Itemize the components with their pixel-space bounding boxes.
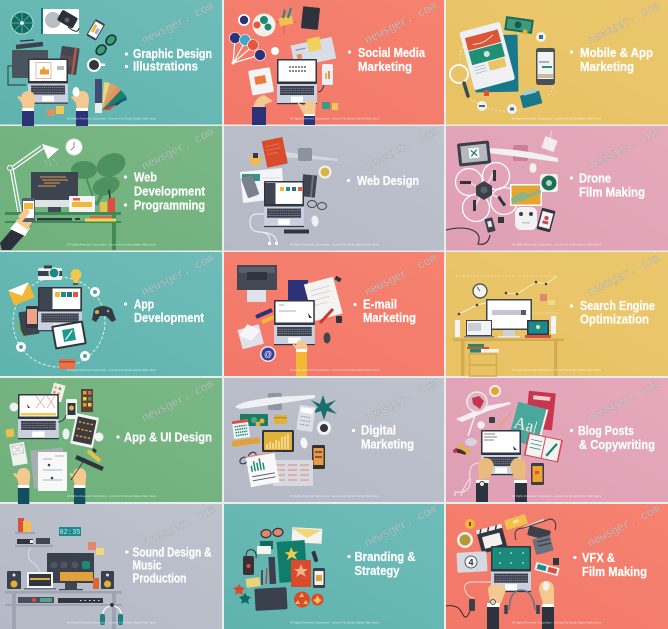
label: VFX & Film Making: VFX & [582, 551, 615, 565]
icons: cloud and cart [477, 101, 517, 114]
panel: VFX & Film Making [446, 502, 668, 629]
laptop [277, 59, 317, 104]
label: Web Development Programming: Web [134, 170, 157, 184]
icon: paper and device [41, 8, 79, 34]
footer note: All Rights Reserved Corporation - Licence For Envato Market Web Users [512, 494, 602, 498]
icon: coffee [317, 421, 331, 435]
icon: pencil cup [276, 8, 296, 34]
icon: teal notebook [475, 35, 519, 96]
watermark: newsger. com [585, 125, 662, 174]
icon: USB drive [311, 551, 318, 562]
icon: paper sheets [30, 447, 67, 491]
icon: clapperboard [476, 524, 507, 554]
watermark: newsger. com [362, 125, 439, 174]
icon: navy book [288, 280, 308, 301]
icon: mouse [300, 437, 308, 449]
icon: green notebook [277, 540, 307, 583]
watermark: newsger. com [139, 377, 216, 426]
icon: swatch [81, 389, 93, 412]
icon: headphones [100, 603, 123, 625]
icon: sticky note [5, 428, 15, 438]
watermark: newsger. com [362, 377, 439, 426]
panel: App & UI Design [0, 377, 222, 504]
desk [5, 591, 122, 629]
icon: countdown frame [456, 551, 488, 573]
icon: book stack [467, 344, 499, 352]
icon: router [541, 130, 560, 152]
hands [476, 458, 527, 502]
hands [487, 581, 554, 629]
icon: calculator [296, 405, 316, 432]
icon: phone [536, 48, 555, 85]
icon: cube [250, 153, 261, 165]
footer note: All Rights Reserved Corporation - Licence For Envato Market Web Users [512, 620, 602, 624]
panel: Search Engine Optimization [446, 251, 668, 376]
panel: Mobile & App Marketing [446, 0, 668, 124]
panel: Web Development Programming [0, 125, 222, 250]
icon: tablet [69, 196, 95, 212]
footer note: All Rights Reserved Corporation - Licence For Envato Market Web Users [512, 116, 602, 120]
icon: gamepad [92, 306, 116, 322]
icon: camera [515, 519, 556, 555]
label: Graphic Design Illustrations: Graphic Design [133, 47, 212, 61]
footer note: All Rights Reserved Corporation - Licence For Envato Market Web Users [512, 368, 602, 372]
icon: mouse [530, 163, 536, 173]
laptop [18, 394, 59, 439]
footer note: All Rights Reserved Corporation - Licence For Envato Market Web Users [512, 242, 602, 246]
footer note: All Rights Reserved Corporation - Licence For Envato Market Web Users [290, 494, 380, 498]
drone [456, 162, 518, 222]
label: Search Engine Optimization [570, 299, 655, 326]
icon: mouse [311, 215, 319, 227]
icon: plant [11, 12, 33, 34]
label: Web Development Programming: Development [134, 184, 206, 198]
icon: report [246, 452, 280, 487]
icon: yellow card [274, 415, 287, 424]
label: Drone Film Making: Film Making [579, 186, 645, 200]
icon: at sign badge [260, 346, 276, 362]
icon: crumpled paper [10, 402, 18, 412]
label: E-mail Marketing: Marketing [363, 311, 416, 325]
icon: coffee [457, 532, 473, 548]
label: Social Media Marketing: Social Media [358, 46, 426, 60]
icon: cards [257, 541, 273, 554]
label: Branding & Strategy [347, 550, 416, 578]
icon: headphones [506, 590, 538, 614]
icons: speakers [7, 571, 114, 589]
label: VFX & Film Making [573, 551, 647, 579]
icon: phone [312, 445, 325, 469]
icon: ruler [268, 557, 276, 584]
footer note: All Rights Reserved Corporation - Licence For Envato Market Web Users [290, 620, 380, 624]
icon: monitor stand [513, 145, 528, 161]
digital clock: 02:35 [59, 529, 81, 537]
icon: glasses [239, 451, 257, 465]
laptop [38, 287, 82, 331]
icons: orbit nodes [16, 287, 100, 361]
phone in hand [0, 198, 35, 250]
icon: ticket [504, 514, 528, 530]
label: App Development: Development [134, 311, 205, 325]
label: Digital Marketing: Marketing [361, 438, 414, 452]
watermark: newsger. com [585, 377, 662, 426]
icon: phone [313, 568, 325, 588]
panel: Drone Film Making [446, 125, 668, 250]
icon: monstera plant [71, 149, 129, 205]
label: Blog Posts & Copywriting [570, 424, 655, 452]
watermark: newsger. com [362, 251, 439, 300]
label: Sound Design & Music Production: Music [132, 558, 162, 572]
icon: monitor back [270, 148, 338, 161]
icon: monitor [486, 299, 532, 338]
icon: notebook [301, 174, 317, 198]
icon: credit card [59, 359, 75, 369]
line chart [458, 276, 557, 315]
icon: ruler [232, 437, 260, 447]
label: Search Engine Optimization: Search Engine [580, 299, 655, 313]
icon: earphones [250, 214, 278, 245]
icon: markers [453, 445, 470, 453]
icon: envelope [237, 321, 264, 349]
label: Drone Film Making [570, 172, 645, 200]
icon: memory chip [553, 558, 559, 565]
icon: 3D glasses [534, 562, 560, 576]
panel: Branding & Strategy [224, 502, 444, 629]
icon: clock [473, 284, 487, 298]
icon: graphics tablet [8, 40, 48, 85]
label: Mobile & App Marketing: Mobile & App [580, 46, 653, 60]
icon: sticky notes [322, 102, 338, 110]
icon: rack units [18, 597, 103, 603]
icon: sheet of data [273, 460, 313, 486]
icon: tablet chart [262, 430, 294, 452]
icon: crumpled paper [94, 432, 104, 442]
panel: App Development [0, 251, 222, 376]
footer note: All Rights Reserved Corporation - Licence For Envato Market Web Users [67, 242, 157, 246]
watermark: newsger. com [139, 251, 216, 300]
icon: envelope [292, 527, 322, 544]
icon: camera [38, 266, 62, 280]
footer note: All Rights Reserved Corporation - Licence For Envato Market Web Users [67, 368, 157, 372]
icon: glasses [261, 528, 283, 538]
icon: black notebook [301, 6, 320, 30]
label: Graphic Design Illustrations [125, 47, 212, 74]
icon: paper with phone [240, 168, 284, 203]
desk [453, 338, 564, 376]
icon: desk lamp [8, 144, 59, 212]
icon: cup [93, 578, 99, 589]
icon: tablet [248, 67, 274, 96]
dashed orbit [13, 277, 105, 367]
icon: ruler and marker [76, 449, 103, 469]
hands [13, 462, 86, 504]
icon: notebook and phone [16, 306, 40, 338]
icon: wires and pod [446, 582, 491, 617]
icon: monitor back [235, 393, 315, 410]
icon: colour fan [95, 79, 127, 113]
panel: E-mail Marketing [224, 251, 444, 376]
icon: phone [58, 399, 77, 422]
icon: tablet [459, 22, 515, 90]
label: E-mail Marketing: E-mail [363, 298, 397, 312]
icon: coffee [318, 166, 332, 178]
label: Web Design: Web Design [357, 174, 419, 188]
icon: laptop [464, 320, 494, 338]
icon: tablet [70, 413, 99, 448]
label: Web Development Programming: Programming [134, 198, 205, 212]
icon: phone [536, 208, 556, 232]
footer note: All Rights Reserved Corporation - Licence For Envato Market Web Users [290, 116, 380, 120]
label: VFX & Film Making: Film Making [582, 565, 647, 579]
icon: coffee [238, 14, 250, 26]
panel: Social Media Marketing [224, 0, 444, 125]
icon: keyboard [37, 218, 80, 220]
label: Web Development Programming [124, 170, 206, 212]
laptop [491, 546, 531, 592]
icon: phone [86, 19, 105, 41]
icon: red book [262, 137, 288, 168]
icon: monitor back [481, 148, 558, 162]
panel: Graphic Design Illustrations [0, 0, 222, 127]
icon: money [504, 16, 534, 35]
icon: calendar [232, 419, 250, 439]
label: Drone Film Making: Drone [579, 172, 611, 186]
icon: shelves and devices [15, 518, 53, 547]
icon: mouse [324, 332, 330, 344]
panel: Sound Design & Music Production [0, 502, 222, 629]
icon: countdown frame: 4 [468, 558, 474, 568]
icon: printer [237, 265, 277, 302]
icon: card case [519, 88, 542, 108]
icon: sticky notes [540, 294, 555, 305]
icon: pens [262, 568, 267, 585]
icon: pen cup [100, 190, 115, 212]
icon: yellow card [246, 577, 261, 588]
icon: tablet [457, 140, 491, 167]
icon: book stack [85, 216, 116, 222]
label: Blog Posts & Copywriting: & Copywriting [579, 438, 655, 452]
icon: black device [243, 550, 256, 575]
drawers [470, 354, 496, 376]
icon: coffee [87, 58, 105, 72]
icon: notebook [58, 46, 80, 75]
icon: glasses [308, 200, 326, 210]
icon: light bulb [71, 269, 81, 285]
label: Search Engine Optimization: Optimization [580, 312, 649, 326]
icon: gear tile [540, 174, 558, 192]
icon: wire [28, 548, 40, 572]
label: Graphic Design Illustrations: Illustrations [133, 60, 198, 74]
icon: like bubble [536, 32, 546, 42]
label: Social Media Marketing [348, 46, 426, 74]
laptop [28, 58, 68, 104]
icon: crumpled paper [271, 47, 279, 55]
laptop [274, 300, 315, 345]
hands [17, 87, 89, 127]
watermark: newsger. com [139, 125, 216, 174]
icon: paper with sticky note [290, 34, 336, 67]
dashed line [456, 276, 560, 313]
icon: keyboard strip [284, 230, 309, 234]
icons: pen and clips [320, 276, 342, 323]
label: Social Media Marketing: Marketing [358, 60, 412, 74]
label: E-mail Marketing [353, 298, 416, 325]
icon: markers [256, 310, 274, 322]
icon: white bar [524, 520, 544, 528]
label: Mobile & App Marketing: Marketing [580, 60, 634, 74]
hand [291, 340, 308, 376]
icon: teal book [508, 402, 548, 447]
icon: tablet [51, 320, 87, 350]
icon: controller [515, 207, 537, 230]
watermark: newsger. com [585, 502, 662, 551]
icon: magnifier [450, 65, 468, 96]
label: Sound Design & Music Production [125, 546, 212, 586]
label: App Development [124, 298, 205, 325]
icon: red book [291, 560, 311, 587]
icon: at sign badge: @ [264, 350, 272, 359]
icon: map photo [510, 184, 542, 206]
laptop [264, 181, 304, 227]
icon: earphone wire [455, 463, 481, 496]
icon: phone [531, 463, 544, 485]
footer note: All Rights Reserved Corporation - Licence For Envato Market Web Users [67, 494, 157, 498]
panel: Web Design [224, 125, 444, 250]
label: App & UI Design: App & UI Design [124, 430, 212, 444]
icons: stars [233, 584, 251, 604]
icon: yellow badge [465, 519, 475, 529]
icon: dark tablet [254, 587, 288, 611]
footer note: All Rights Reserved Corporation - Licence For Envato Market Web Users [67, 620, 157, 624]
hands [252, 95, 316, 125]
icon: sticky notes [88, 542, 104, 555]
icon: monitor with code [31, 172, 78, 212]
icon: plant [311, 395, 337, 420]
icon: teal book: Aa| [512, 413, 539, 437]
icon: envelope [8, 282, 35, 305]
icon: plate [252, 14, 276, 36]
footer note: All Rights Reserved Corporation - Licence For Envato Market Web Users [290, 242, 380, 246]
watermark: newsger. com [141, 502, 218, 551]
label: Digital Marketing: Digital [361, 424, 396, 438]
icon: wireframe paper [9, 442, 28, 466]
icon: coffee [489, 385, 501, 397]
label: Mobile & App Marketing [570, 46, 653, 74]
icon: dashed ring [460, 30, 556, 111]
icon: monitor [47, 553, 94, 590]
label: App Development: App [134, 298, 154, 312]
icon: money [240, 414, 268, 426]
icons: speakers [455, 316, 556, 337]
panel: Digital Marketing [224, 377, 444, 502]
watermark: newsger. com [585, 251, 662, 300]
icon: spiral notebook [524, 433, 563, 462]
panel: Blog Posts & Copywriting [446, 377, 668, 502]
laptop [481, 430, 521, 475]
icon: mouse [62, 428, 70, 440]
icon: tablet [525, 320, 551, 338]
footer note: All Rights Reserved Corporation - Licence For Envato Market Web Users [290, 368, 380, 372]
watermark: newsger. com [362, 502, 439, 551]
label: Sound Design & Music Production: Sound Design & [132, 546, 212, 560]
label: Branding & Strategy: Strategy [354, 564, 400, 578]
icon: colour card [50, 383, 66, 402]
icons: small cube and crumpled paper [477, 414, 510, 429]
label: Blog Posts & Copywriting: Blog Posts [578, 424, 634, 438]
icon: paper [304, 277, 343, 321]
icon: wall clock [66, 139, 82, 155]
icon: desk lamp [456, 392, 511, 446]
icons: badges [294, 592, 324, 608]
label: Sound Design & Music Production: Production [132, 572, 186, 586]
social icons [230, 32, 266, 64]
icon: red notebook [525, 391, 556, 430]
desk [5, 212, 121, 250]
footer note: All Rights Reserved Corporation - Licence For Envato Market Web Users [67, 116, 157, 120]
icon: phone [318, 64, 333, 92]
icon: laptop [24, 572, 56, 590]
icon: battery and cable [446, 217, 504, 244]
icon: glasses [94, 33, 118, 57]
label: Branding & Strategy: Branding & [354, 550, 416, 564]
icon: sticky notes [47, 106, 64, 116]
label: Digital Marketing [352, 424, 414, 452]
